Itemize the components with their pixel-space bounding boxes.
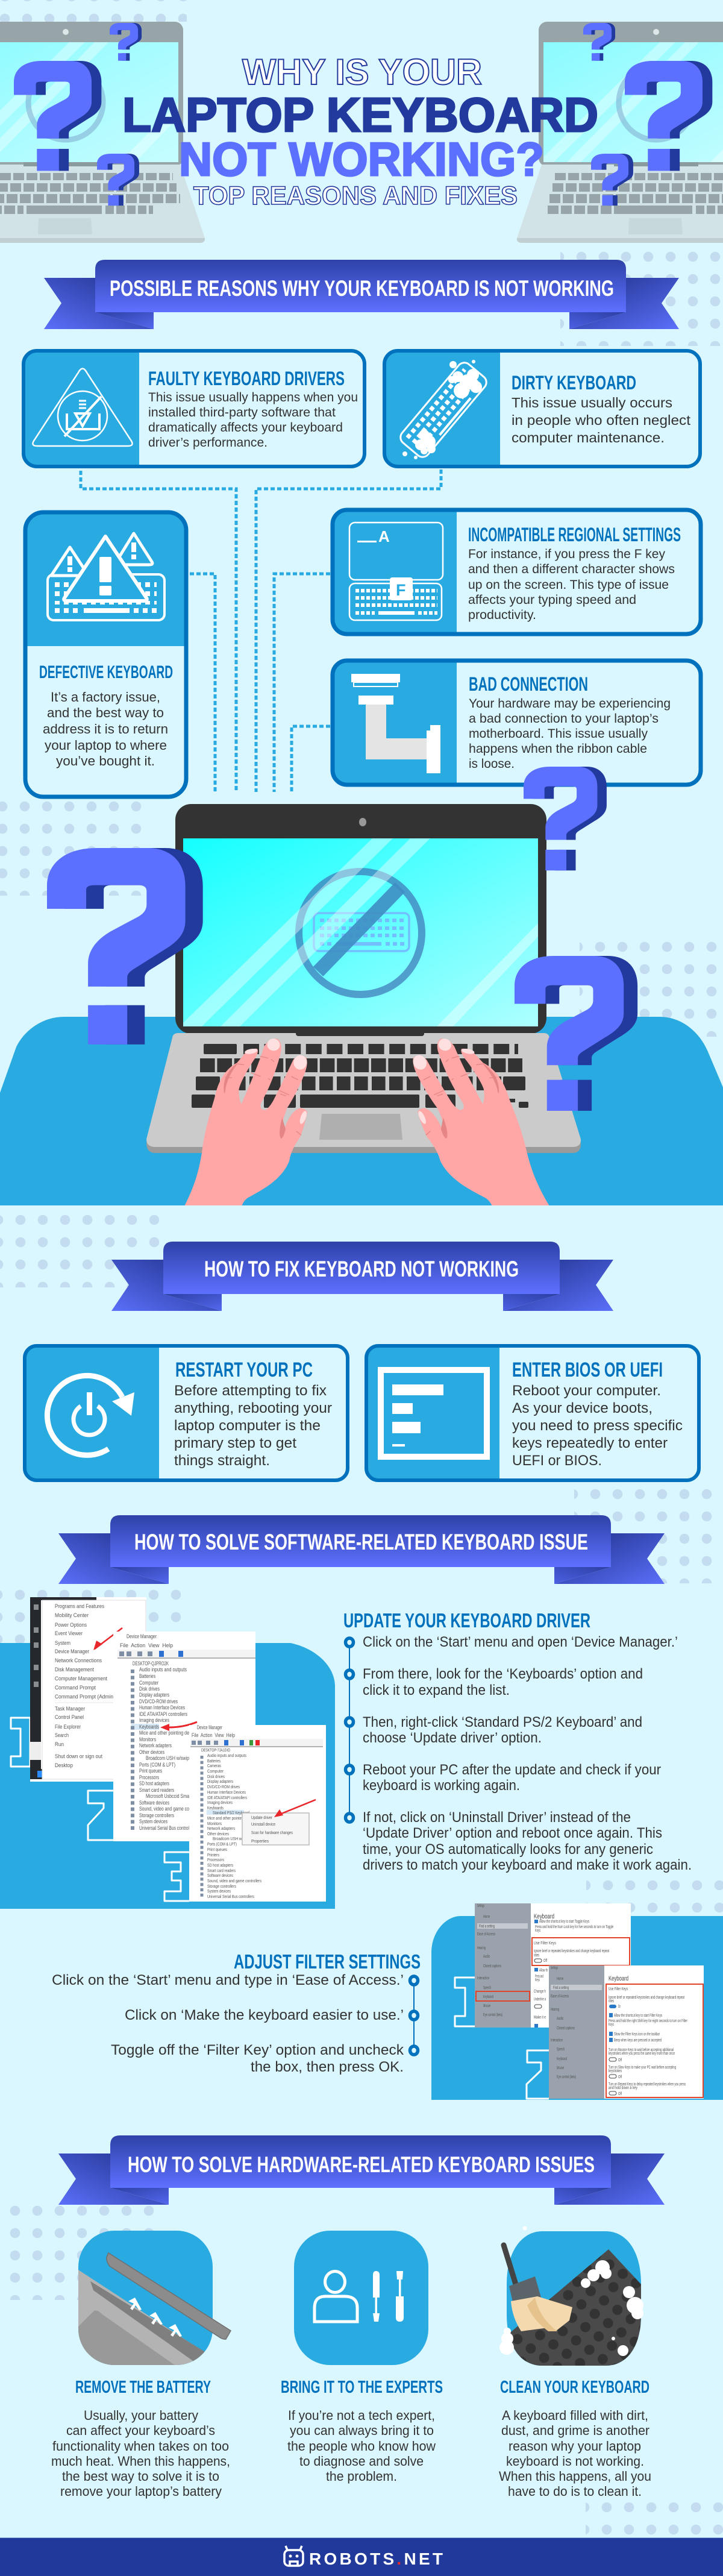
screenshot: start menu: Computer Management: [55, 1676, 107, 1682]
text block: remove your laptop’s battery: [60, 2484, 222, 2499]
text block: filter steps: Toggle off the ‘Filter Key’ option and uncheck: [111, 2042, 404, 2058]
text block: update steps: choose ‘Update driver’ option.: [363, 1730, 542, 1746]
context menu: Uninstall device: [251, 1823, 275, 1827]
screenshot: ease of access keyboard settings: Hearing: [477, 1946, 486, 1950]
question marks: header right: [583, 23, 712, 206]
screenshot: device manager: SD host adapters: [139, 1780, 169, 1786]
screenshot: device manager: Ports (COM & LPT): [139, 1762, 175, 1768]
step numbers: update driver: [11, 1718, 189, 1901]
dots: bottom right: [586, 2502, 723, 2537]
text block: Your hardware may be experiencing: [469, 697, 671, 711]
screenshot: update driver: Smart card readers: [207, 1869, 236, 1873]
text block: driver’s performance.: [148, 436, 268, 450]
text block: much heat. When this happens,: [51, 2454, 230, 2469]
screenshot: device manager: Keyboards: [139, 1724, 159, 1730]
screenshot: start menu: [30, 1597, 146, 1782]
text block: [499, 2408, 651, 2499]
screenshot: use filter keys settings: Off: [618, 2092, 622, 2096]
dots: left of hardware icons: [10, 2205, 154, 2300]
screenshot: use filter keys settings: Closed captions: [557, 2026, 575, 2031]
banner: software issue: [58, 1515, 665, 1584]
prohibited keyboard symbol: [299, 872, 422, 994]
screenshot: device manager: Mice and other pointing de: [139, 1730, 189, 1736]
dots: below update list: [586, 1880, 723, 1916]
panel: clean your keyboard: [499, 2378, 651, 2499]
screenshot: update driver: Monitors: [207, 1822, 222, 1826]
text block: This issue usually occurs: [512, 395, 672, 410]
laptop illustration: [146, 804, 581, 1153]
screenshot: device manager: DVD/CD-ROM drives: [139, 1698, 178, 1704]
screenshot: start menu: Power Options: [55, 1622, 87, 1628]
logo text: ROBOTS.NET: [309, 2549, 443, 2568]
text block: update steps: [363, 1634, 692, 1873]
laptop base: [146, 1033, 581, 1153]
screenshot: update driver: Software devices: [207, 1874, 233, 1878]
screenshot: update driver: Standard PS/2 Keyboard: [213, 1811, 249, 1815]
screenshot: ease of access keyboard settings: Use Filter Keys: [534, 1941, 556, 1946]
text block: you’ve bought it.: [56, 753, 155, 768]
panel: dirty keyboard: [384, 351, 700, 467]
screenshot: ease of access keyboard settings: Allow the shortcut key to start Toggle Keys: [539, 1920, 589, 1924]
timeline: update steps: [346, 1638, 353, 1822]
text block: the problem.: [326, 2469, 397, 2484]
text block: When this happens, all you: [499, 2469, 651, 2484]
text block: [468, 547, 675, 622]
screenshot: start menu: Event Viewer: [55, 1630, 83, 1636]
screenshot: device manager: Universal Serial Bus control: [139, 1825, 189, 1831]
text block: filter steps: Click on ‘Make the keyboard easier to use.’: [125, 2007, 404, 2023]
text block: you need to press specific: [512, 1418, 683, 1434]
screenshot: update driver: Ports (COM & LPT): [207, 1842, 237, 1847]
hand: right: [410, 1037, 549, 1205]
screenshot: device manager: Network adapters: [139, 1742, 172, 1748]
heading: FAULTY KEYBOARD DRIVERS: [148, 368, 345, 389]
screenshot: start menu: File Explorer: [55, 1724, 81, 1730]
text block: to diagnose and solve: [299, 2454, 424, 2469]
screenshot: use filter keys settings: Show the Filter Keys icon on the taskbar: [614, 2032, 660, 2037]
step numbers: filter settings: [455, 1978, 549, 2099]
screenshot: device manager: Device Manager: [127, 1633, 157, 1639]
screenshot: ease of access keyboard settings: Eye control (beta): [483, 2013, 502, 2017]
text block: Before attempting to fix: [174, 1383, 327, 1399]
screenshot: device manager: Print queues: [139, 1768, 162, 1774]
heading: RESTART YOUR PC: [175, 1359, 313, 1381]
trackpad: [319, 1114, 402, 1140]
text block: update steps: click it to expand the list.: [363, 1682, 510, 1698]
screenshot: update driver: Computer: [207, 1770, 224, 1774]
text block: [43, 690, 168, 768]
screenshot: ease of access keyboard settings: Press and hold the Num Lock key for five seconds to turn on Toggle: [535, 1925, 613, 1929]
screenshot: update driver: Disk drives: [207, 1775, 225, 1779]
screenshot: device manager: Audio inputs and outputs: [139, 1667, 187, 1673]
screenshot: ease of access keyboard settings: Audio: [483, 1955, 490, 1959]
connectors: dashed lines: [81, 470, 441, 792]
dots: left of screenshots: [0, 1589, 181, 1643]
screenshot: start menu: Disk Management: [55, 1667, 94, 1673]
text block: is loose.: [469, 757, 515, 771]
dots: above desk right: [580, 941, 723, 1037]
text block: a bad connection to your laptop’s: [469, 712, 659, 726]
screenshot: device manager: Storage controllers: [139, 1812, 174, 1818]
header laptop: left: [0, 22, 205, 243]
screenshot: update driver: Other devices: [207, 1832, 229, 1836]
screenshot: device manager: Imaging devices: [139, 1717, 169, 1723]
screenshot: device manager: System devices: [139, 1818, 167, 1824]
screenshot: ease of access keyboard settings: Interaction: [477, 1976, 489, 1981]
screenshot: use filter keys settings: Turn on Slow Keys to make your PC wait before accepting: [609, 2066, 676, 2070]
text block: and the best way to: [47, 705, 164, 720]
dots: right above third banner: [574, 1489, 723, 1583]
screenshot: ease of access keyboard settings: Change h: [534, 1990, 546, 1994]
text block: [512, 1383, 683, 1469]
text block: and then a different character shows: [468, 562, 675, 576]
context menu: Properties: [251, 1839, 269, 1844]
screenshot: update driver: Print queues: [207, 1848, 227, 1852]
screenshot: ease of access keyboard settings: [475, 1903, 631, 2028]
icon: ribbon cable: [351, 674, 440, 773]
screenshot: update driver: IDE ATA/ATAPI controllers: [207, 1796, 247, 1800]
text block: UEFI or BIOS.: [512, 1453, 602, 1469]
panel: faulty keyboard drivers: [23, 351, 365, 467]
question marks: header left: [14, 23, 142, 206]
webcam: [359, 818, 366, 826]
icon: clean your keyboard: [499, 2226, 643, 2366]
screenshot: update driver: [189, 1724, 326, 1902]
screenshot: update driver: Human Interface Devices: [207, 1791, 246, 1795]
dots: above desk left: [0, 801, 142, 896]
text block: A keyboard filled with dirt,: [502, 2408, 648, 2423]
text block: update steps: keyboard is working again.: [363, 1777, 520, 1794]
screenshot: use filter keys settings: Hearing: [551, 2008, 559, 2012]
panel: bad connection: [333, 661, 701, 785]
text block: [174, 1383, 332, 1469]
title: NOT WORKING?: [179, 133, 544, 186]
screenshot: use filter keys settings: keystrokes: [609, 2069, 622, 2073]
screenshot: start menu: Mobility Center: [55, 1612, 89, 1618]
icon: restart power: [47, 1375, 134, 1455]
text block: up on the screen. This type of issue: [468, 578, 669, 592]
text block: update steps: time, your OS automatically looks for any generic: [363, 1841, 653, 1858]
screenshot: device manager: Batteries: [139, 1673, 155, 1679]
text block: [512, 395, 691, 445]
context menu: Scan for hardware changes: [251, 1831, 293, 1835]
panel: screenshots background: [0, 1643, 335, 1909]
icon: bios screen: [381, 1370, 487, 1457]
screenshot: device manager: Disk drives: [139, 1686, 160, 1692]
text block: happens when the ribbon cable: [469, 742, 647, 756]
text block: primary step to get: [174, 1435, 296, 1451]
screenshot: ease of access keyboard settings: Allow th: [539, 1968, 548, 1973]
title: TOP REASONS AND FIXES: [193, 181, 518, 210]
hand: left: [185, 1037, 308, 1205]
heading: ENTER BIOS OR UEFI: [512, 1359, 663, 1381]
banner: possible reasons: [44, 260, 679, 329]
text block: If you’re not a tech expert,: [288, 2408, 435, 2423]
screenshot: device manager: Broadcom USH w/swip: [146, 1755, 189, 1761]
text block: anything, rebooting your: [174, 1400, 332, 1416]
screenshot: ease of access keyboard settings: rates: [534, 1953, 539, 1958]
panel: incompatible regional settings: [333, 510, 701, 634]
title: LAPTOP KEYBOARD: [122, 88, 598, 142]
screenshot: ease of access keyboard settings: Press and: [535, 1974, 543, 1979]
text block: update steps: If not, click on ‘Uninstall Driver’ instead of the: [363, 1809, 631, 1826]
text block: update steps: ‘Update Driver’ option and reboot once again. This: [363, 1825, 662, 1841]
screenshot: use filter keys settings: Speech: [557, 2047, 565, 2052]
screenshot: start menu: Programs and Features: [55, 1603, 104, 1609]
heading: DEFECTIVE KEYBOARD: [39, 662, 173, 682]
screenshot: device manager: Display adapters: [139, 1692, 169, 1698]
text block: affects your typing speed and: [468, 593, 636, 607]
heading: DIRTY KEYBOARD: [512, 372, 636, 394]
screenshot: ease of access keyboard settings: Mouse: [483, 2004, 490, 2008]
icon: remove the battery: [78, 2231, 231, 2365]
screenshot: update driver: Batteries: [207, 1759, 221, 1764]
panel: defective keyboard: [25, 512, 186, 797]
text block: installed third-party software that: [148, 406, 336, 419]
screenshot: update driver: Keyboards: [207, 1806, 224, 1811]
text block: For instance, if you press the F key: [468, 547, 665, 561]
heading: update your keyboard driver: UPDATE YOUR KEYBOARD DRIVER: [343, 1609, 590, 1632]
text block: This issue usually happens when you: [148, 391, 358, 404]
text block: filter steps: [52, 1972, 404, 2075]
screenshot: update driver: Universal Serial Bus controllers: [207, 1895, 254, 1899]
screenshot: use filter keys settings: Use Filter Keys: [609, 1987, 628, 1991]
text block: [51, 2408, 230, 2499]
title: [122, 52, 598, 210]
screenshot: use filter keys settings: rates: [609, 1999, 614, 2003]
screenshot: update driver: Mice and other pointe: [207, 1817, 242, 1821]
text block: the best way to solve it is to: [62, 2469, 219, 2484]
screenshot: start menu: Run: [55, 1741, 64, 1747]
screenshot: use filter keys settings: Find a setting: [553, 1986, 569, 1990]
text block: dust, and grime is another: [501, 2423, 649, 2438]
text block: laptop computer is the: [174, 1418, 321, 1434]
screenshot: device manager: Smart card readers: [139, 1787, 174, 1793]
title: WHY IS YOUR: [242, 52, 482, 92]
text block: update steps: From there, look for the ‘Keyboards’ option and: [363, 1666, 643, 1682]
screenshot: start menu: Control Panel: [55, 1714, 84, 1720]
screenshot: update driver: DVD/CD-ROM drives: [207, 1785, 240, 1789]
screenshot: start menu: Command Prompt (Admin: [55, 1694, 113, 1700]
screenshot: ease of access keyboard settings: Keyboard: [534, 1913, 554, 1920]
text block: update steps: drivers to match your keyboard and make it work again.: [363, 1857, 692, 1873]
icon: defective keyboard with warnings: [48, 533, 164, 620]
context menu: [242, 1813, 309, 1845]
dots: section two left: [0, 1214, 160, 1287]
panel: filter settings background: [431, 1916, 723, 2100]
screenshot: update driver: Processors: [207, 1858, 224, 1862]
text block: update steps: Reboot your PC after the update and check if your: [363, 1762, 661, 1778]
banner: how to fix: [111, 1242, 613, 1311]
text block: update steps: Click on the ‘Start’ menu and open ‘Device Manager.’: [363, 1634, 678, 1650]
desk background: [0, 1017, 723, 1205]
icon: screen and keyboard: [349, 523, 443, 620]
banner: how to fix: HOW TO FIX KEYBOARD NOT WORKING: [204, 1257, 519, 1281]
laptop hinge: [296, 1029, 424, 1036]
screenshot: ease of access keyboard settings: Off: [543, 1959, 547, 1963]
screenshot: start menu: System: [55, 1640, 70, 1646]
text block: address it is to return: [43, 721, 168, 737]
text block: [287, 2408, 436, 2484]
text block: productivity.: [468, 608, 536, 622]
screenshot: update driver: Device Manager: [197, 1724, 222, 1730]
text block: things straight.: [174, 1453, 270, 1469]
text block: [469, 697, 671, 771]
screenshot: ease of access keyboard settings: Ignore brief or repeated keystrokes and change keyboard repeat: [534, 1949, 609, 1953]
dots: right of first banner: [560, 251, 723, 346]
banner: hardware issues: [58, 2135, 665, 2205]
heading: adjust filter settings: ADJUST FILTER SETTINGS: [234, 1950, 421, 1973]
heading: CLEAN YOUR KEYBOARD: [500, 2378, 649, 2397]
panel: restart your pc: [25, 1346, 348, 1480]
text block: can affect your keyboard’s: [66, 2423, 215, 2438]
screenshot: use filter keys settings: Beep when keys are pressed or accepted: [614, 2038, 662, 2043]
screenshot: update driver: System devices: [207, 1890, 231, 1894]
screenshot: ease of access keyboard settings: Find a setting: [479, 1924, 495, 1929]
screenshot: device manager: DESKTOP-QJPRO2K: [133, 1660, 169, 1667]
text block: keyboard is not working.: [506, 2454, 644, 2469]
screenshot: update driver: Imaging devices: [207, 1801, 233, 1805]
screenshot: use filter keys settings: Keyboard: [557, 2057, 567, 2061]
screenshot: use filter keys settings: Turn on Bounce Keys to wait before accepting additional: [609, 2048, 674, 2052]
text block: have to do is to clean it.: [508, 2484, 642, 2499]
text block: Usually, your battery: [84, 2408, 198, 2423]
text block: reason why your laptop: [509, 2439, 641, 2454]
screenshot: device manager: Monitors: [139, 1736, 156, 1742]
icon: dirty keyboard: [398, 360, 489, 460]
screenshot: ease of access keyboard settings: Settings: [477, 1904, 484, 1908]
text block: computer maintenance.: [512, 430, 665, 445]
text block: Reboot your computer.: [512, 1383, 661, 1399]
screenshot: start menu: Shut down or sign out: [55, 1753, 102, 1759]
screenshot: device manager: [113, 1632, 255, 1841]
screenshot: ease of access keyboard settings: Closed captions: [483, 1964, 501, 1968]
screenshot: use filter keys settings: Settings: [551, 1966, 558, 1970]
text block: filter steps: Click on the ‘Start’ menu and type in ‘Ease of Access.’: [52, 1972, 404, 1988]
screenshot: use filter keys settings: keystrokes when you press the same key more than once: [609, 2052, 675, 2056]
text block: your laptop to where: [45, 738, 167, 753]
screenshot: use filter keys settings: [549, 1965, 704, 2099]
laptop lid: [175, 804, 546, 1034]
icon: screen and keyboard: A: [378, 527, 390, 545]
text block: It’s a factory issue,: [51, 690, 160, 705]
screenshot: device manager: Sound, video and game co: [139, 1806, 189, 1812]
screenshot: start menu: Device Manager: [55, 1648, 89, 1654]
screenshot: use filter keys settings: Home: [557, 1977, 563, 1981]
screenshot: ease of access keyboard settings: Keyboard: [483, 1995, 493, 1999]
screenshot: ease of access keyboard settings: Ease of Access: [477, 1932, 495, 1937]
screenshot: update driver: Broadcom USH w/: [213, 1837, 243, 1841]
panel: enter bios or uefi: [366, 1346, 699, 1480]
text block: dramatically affects your keyboard: [148, 421, 343, 435]
panel: bring it to the experts: [281, 2378, 443, 2484]
text block: the people who know how: [287, 2439, 436, 2454]
screenshot: device manager: File Action View Help: [120, 1642, 173, 1648]
screenshot: start menu: Search: [55, 1732, 69, 1738]
screenshot: update driver: Sound, video and game controllers: [207, 1879, 261, 1883]
screenshot: use filter keys settings: Eye control (beta): [557, 2075, 576, 2079]
keyboard keys: [192, 1044, 528, 1108]
screenshot: use filter keys settings: Keys: [609, 2023, 614, 2027]
icon: prohibited driver triangle: [33, 369, 133, 446]
footer: [0, 2537, 723, 2576]
screenshot: ease of access keyboard settings: Speech: [483, 1986, 491, 1990]
screenshot: use filter keys settings: Off: [618, 2075, 622, 2079]
text block: [148, 391, 358, 450]
screenshot: start menu: Desktop: [55, 1762, 73, 1768]
screenshot: use filter keys settings: Off: [618, 2058, 622, 2062]
screenshot: device manager: Processors: [139, 1774, 159, 1780]
screenshot: use filter keys settings: and hold down a key: [609, 2086, 637, 2090]
screenshot: update driver: Network adapters: [207, 1827, 235, 1831]
heading: BAD CONNECTION: [469, 673, 588, 695]
screenshot: update driver: DESKTOP-7JA1DIO: [201, 1748, 230, 1753]
screenshot: ease of access keyboard settings: Make it e: [534, 2015, 546, 2020]
icon: robot logo: [284, 2546, 303, 2566]
screenshot: update driver: Audio inputs and outputs: [207, 1754, 246, 1758]
text block: keys repeatedly to enter: [512, 1435, 668, 1451]
screenshot: update driver: Display adapters: [207, 1780, 233, 1784]
screenshot: ease of access keyboard settings: Home: [483, 1915, 490, 1919]
screenshot: update driver: File Action View Help: [192, 1732, 235, 1738]
text block: As your device boots,: [512, 1400, 653, 1416]
screenshot: ease of access keyboard settings: Underline a: [534, 1997, 546, 2002]
header laptop: right: [517, 22, 723, 243]
screenshot: ease of access keyboard settings: Keys: [535, 1929, 540, 1933]
icon: screen and keyboard: F: [396, 581, 406, 599]
question marks: around laptop: [47, 767, 637, 1111]
screenshot: device manager: IDE ATA/ATAPI controllers: [139, 1711, 187, 1717]
screenshot: update driver: Cameras: [207, 1764, 221, 1768]
screenshot: device manager: Software devices: [139, 1800, 169, 1806]
screenshot: device manager: Human Interface Devices: [139, 1704, 185, 1711]
screen glare: [183, 838, 538, 1026]
screenshot: use filter keys settings: Allow the shortcut key to start Filter Keys: [614, 2014, 662, 2018]
heading: REMOVE THE BATTERY: [75, 2378, 211, 2397]
screenshot: start menu: Task Manager: [55, 1706, 85, 1712]
panel: remove the battery: [51, 2378, 230, 2499]
screenshot: use filter keys settings: Mouse: [557, 2066, 564, 2070]
screenshot: device manager: Computer: [139, 1680, 158, 1686]
laptop screen: [183, 838, 538, 1026]
timeline: filter steps: [410, 1976, 418, 2055]
screenshot: ease of access keyboard settings: Keys: [535, 1978, 540, 1982]
text block: filter steps: the box, then press OK.: [251, 2059, 404, 2075]
screenshot: start menu: Network Connections: [55, 1657, 102, 1663]
text block: functionality when takes on too: [52, 2439, 229, 2454]
text block: update steps: Then, right-click ‘Standard PS/2 Keyboard’ and: [363, 1714, 642, 1730]
screenshot: update driver: SD host adapters: [207, 1864, 233, 1868]
heading: BRING IT TO THE EXPERTS: [281, 2378, 443, 2397]
screenshot: update driver: Storage controllers: [207, 1885, 236, 1889]
screenshot: start menu: Command Prompt: [55, 1685, 96, 1691]
screenshot: device manager: Microsoft Usbccid Sma: [146, 1793, 189, 1799]
text block: you can always bring it to: [290, 2423, 434, 2438]
screenshot: use filter keys settings: Audio: [557, 2017, 563, 2021]
screenshot: update driver: Printers: [207, 1853, 219, 1858]
screenshot: device manager: Other devices: [139, 1749, 164, 1755]
context menu: Update driver: [251, 1816, 273, 1820]
screenshot: use filter keys settings: Keyboard: [609, 1975, 628, 1982]
text block: motherboard. This issue usually: [469, 727, 648, 741]
screenshot: use filter keys settings: Interaction: [551, 2038, 563, 2043]
screenshot: use filter keys settings: On: [618, 2005, 621, 2009]
icon: bring it to the experts: [294, 2231, 428, 2365]
dots: top left: [0, 0, 187, 22]
text block: in people who often neglect: [512, 412, 691, 428]
screenshot: use filter keys settings: Ease of Access: [551, 1994, 569, 1999]
